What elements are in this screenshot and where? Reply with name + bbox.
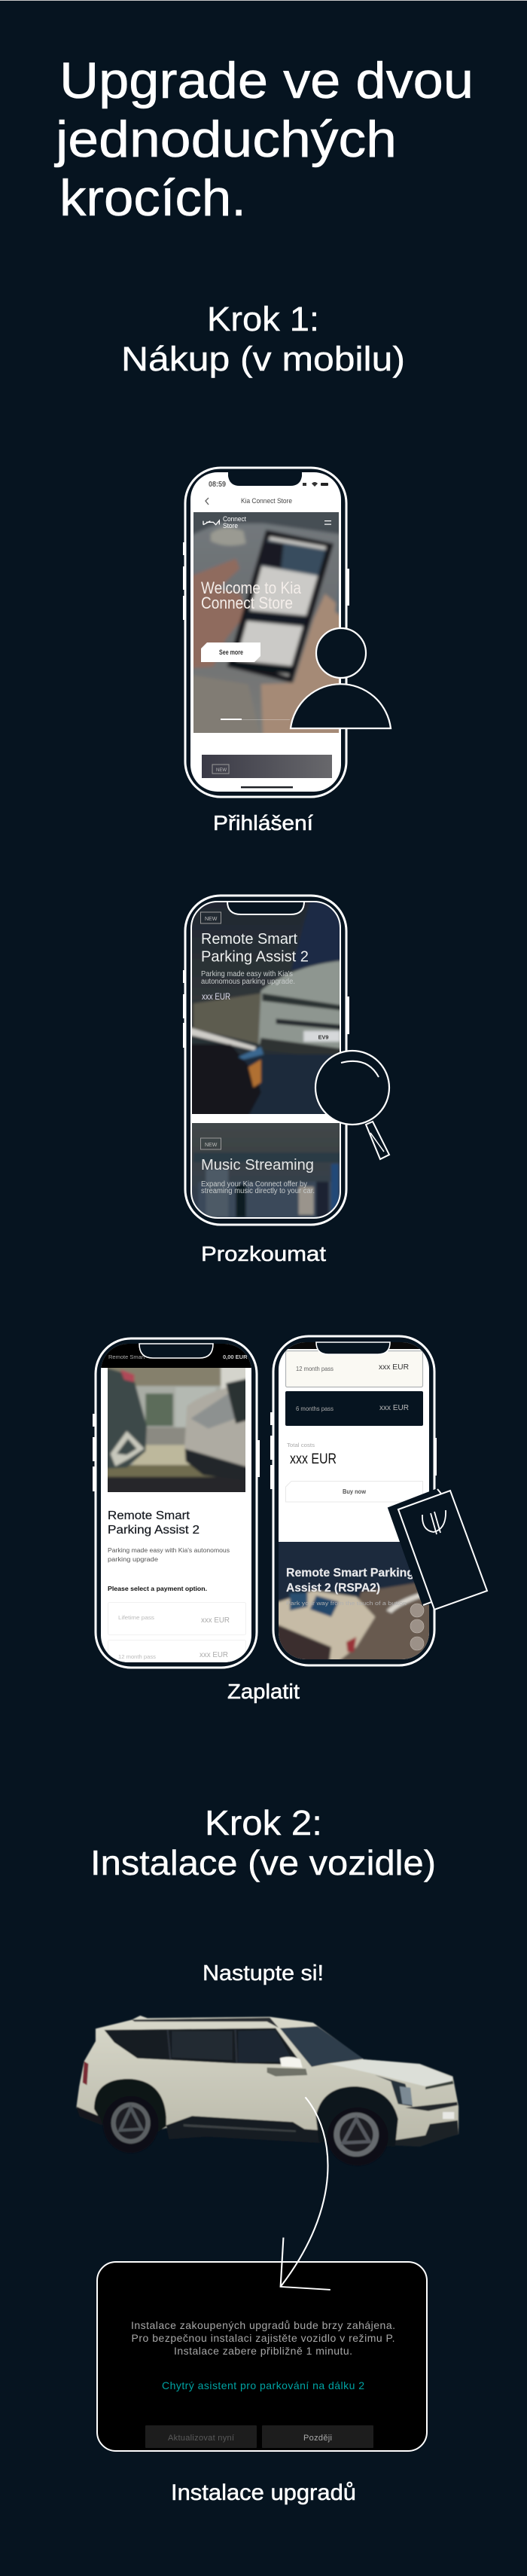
heading: step 2: Instalace (ve vozidle) [90,1843,436,1882]
total costs [287,1443,336,1463]
dialog message [131,2319,395,2357]
total costs: Total costs [287,1442,315,1448]
heading: step 2: Krok 2: [205,1803,322,1842]
card text: Music Streaming: NEW [205,1143,218,1148]
card text: Music Streaming [200,1138,315,1195]
photo: parked cars [108,1368,245,1492]
card text: Remote Smart Parking Assist 2: Parking Assist 2 [201,949,309,966]
dialog feature name: Chytrý asistent pro parkování na dálku 2 [162,2379,364,2391]
label: install upgrades: Instalace upgradů [171,2480,356,2505]
payment options: Lifetime pass [118,1614,154,1621]
photo: car from above [279,1542,429,1659]
euro symbol [422,1510,446,1534]
photo: people [192,1123,340,1217]
text block: product description: parking upgrade [108,1556,159,1563]
card text: Music Streaming: Expand your Kia Connect offer by [201,1180,307,1189]
card text: Remote Smart Parking Assist 2: autonomous parking upgrade. [201,978,295,986]
dialog message: Pro bezpečnou instalaci zajistěte vozidlo v režimu P. [131,2332,394,2344]
card text: Remote Smart Parking Assist 2 [200,912,309,1002]
card text: Music Streaming: streaming music directly to your car. [201,1187,315,1195]
buy now button: Buy now [343,1488,367,1495]
text block: product description: Please select a payment option. [108,1586,207,1592]
phone: payment [269,1336,439,1667]
notch [316,1342,390,1354]
button: update now: Aktualizovat nyní [168,2434,234,2443]
text block: product description: Remote Smart [108,1509,190,1522]
screen photo: hand holding phone [193,512,339,733]
payment options [108,1602,246,1662]
label: explore: Prozkoumat [201,1242,326,1265]
payment options: xxx EUR [201,1616,230,1625]
screen header: Kia Connect Store [241,497,292,505]
photo overlay text and controls: Store [223,522,238,530]
title [54,52,474,227]
arrow: from car to dialog [281,2097,331,2290]
phone: sign in [173,468,359,797]
total costs: xxx EUR [290,1451,337,1467]
label: get in: Nastupte si! [203,1961,324,1985]
icon: person [291,628,391,728]
photo overlay text: Assist 2 (RSPA2) [286,1582,380,1595]
icon: magnifier [315,1051,389,1159]
screen bottom card [202,755,332,788]
button: later: Později [303,2434,332,2443]
screen bottom card: NEW [216,768,227,773]
option: 6 months pass selected: 6 months pass [296,1406,334,1412]
screen header [206,472,328,505]
option: 6 months pass selected: xxx EUR [379,1403,409,1412]
heading: step 2 [90,1803,436,1882]
notch [139,1344,213,1358]
text block: product description: Parking Assist 2 [108,1524,200,1537]
dialog message: Instalace zabere přibližně 1 minutu. [174,2345,352,2357]
card text: Remote Smart Parking Assist 2: Remote Smart [201,931,297,948]
text block: product description: Parking made easy with Kia's autonomous [108,1547,230,1554]
photo overlay text and controls: Connect [223,515,246,523]
phone: explore [183,896,349,1225]
card text: Music Streaming: Music Streaming [201,1157,314,1174]
label: sign in: Přihlášení [213,811,313,835]
card text: Remote Smart Parking Assist 2: xxx EUR [202,991,230,1002]
screen content: Remote Smart [108,1354,145,1360]
title: jednoduchých [54,111,397,168]
screen content [192,902,340,1217]
screen content [98,1341,254,1672]
buy now button [286,1481,423,1502]
card text: Remote Smart Parking Assist 2: Parking made easy with Kia's [201,970,293,978]
label: pay: Zaplatit [227,1680,300,1703]
car image [76,2016,458,2165]
photo overlay text and controls [201,515,331,720]
screen content: 0,00 EUR [223,1354,248,1360]
card text: Remote Smart Parking Assist 2: NEW [205,917,218,922]
payment options: xxx EUR [200,1651,228,1659]
payment options: 12 month pass [118,1653,156,1660]
screen header: 08:59 [209,481,226,489]
heading: step 1 [121,300,405,378]
install dialog [97,2262,427,2451]
photo: car and driver: EV9 [318,1034,328,1041]
screen content [279,1342,429,1659]
photo overlay text and controls: Welcome to Kia [201,578,302,597]
option: 12 month pass: xxx EUR [379,1363,409,1372]
photo: car and driver [192,902,340,1114]
option: 12 month pass: 12 month pass [296,1366,334,1372]
front wheel [327,2107,388,2165]
photo overlay text and controls: Connect Store [201,594,293,612]
heading: step 1: Nákup (v mobilu) [121,340,405,378]
heading: step 1: Krok 1: [207,300,319,338]
photo overlay text: Park your way from the touch of a button [286,1600,407,1607]
text block: product description [108,1509,230,1592]
phone: product details [93,1338,260,1672]
photo overlay text and controls: See more [219,649,243,656]
notch and screen outline [191,902,340,1218]
floating buttons [410,1604,424,1650]
option: 6 months pass selected [285,1391,423,1426]
photo overlay text: Remote Smart Parking [286,1567,414,1579]
rear wheel [103,2096,158,2153]
photo overlay text [286,1567,414,1607]
option: 12 month pass [286,1351,423,1387]
icon: banknotes [388,1489,487,1610]
title: Upgrade ve dvou [59,52,474,109]
dialog message: Instalace zakoupených upgradů bude brzy zahájena. [131,2319,395,2331]
title: krocích. [59,169,246,227]
button: later [262,2425,373,2448]
button: update now [145,2425,257,2448]
